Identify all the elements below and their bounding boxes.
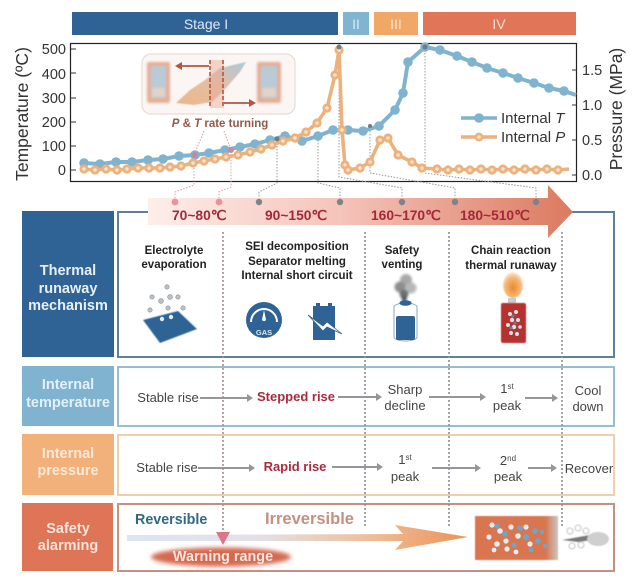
right axis ticks and labels [572, 63, 602, 184]
legend: Internal P [501, 129, 565, 146]
flow arrows [200, 397, 554, 398]
internal temperature stages: Stepped rise [257, 389, 335, 404]
panel: safety alarming [22, 503, 614, 571]
left axis title: Temperature (ºC) [12, 47, 32, 181]
right axis title: Pressure (MPa) [606, 48, 626, 170]
left axis ticks and labels: 0 [58, 163, 66, 179]
panel: thermal runaway mechanism [22, 211, 614, 357]
mechanism captions: Electrolyte [145, 245, 203, 257]
right axis ticks and labels: 1.0 [582, 98, 602, 114]
mechanism captions: evaporation [141, 259, 207, 271]
internal pressure stages: 2 [500, 453, 516, 468]
internal pressure stages: Rapid rise [264, 459, 326, 474]
row label: pressure [37, 463, 99, 479]
right axis ticks and labels: 0.0 [582, 168, 602, 184]
internal pressure stages: peak [391, 469, 420, 484]
reversibility gradient arrow [127, 525, 468, 550]
left axis ticks and labels: 200 [42, 115, 66, 131]
internal temperature stages: decline [384, 398, 426, 413]
mechanism captions: SEI decomposition [245, 241, 349, 253]
temperature range labels: 180~510℃ [460, 208, 530, 223]
temperature range labels [172, 208, 530, 223]
mechanism captions: Safety [385, 245, 420, 257]
stage bar: II [352, 16, 360, 32]
left axis ticks and labels: 300 [42, 91, 66, 107]
internal temperature stages: 1 [500, 381, 514, 396]
internal temperature stages: Stable rise [137, 390, 199, 405]
row label: alarming [38, 538, 98, 554]
mechanism captions: thermal runaway [465, 260, 557, 272]
internal pressure stages: nd [507, 454, 516, 463]
temperature range labels: 160~170℃ [371, 208, 441, 223]
warning range [151, 548, 291, 566]
icon: electrolyte evaporation [143, 285, 197, 343]
stage bar: IV [492, 16, 506, 32]
panel: internal pressure [22, 434, 614, 495]
warning marker arrowhead [216, 532, 230, 545]
warning range: Warning range [173, 549, 273, 565]
arrow dots [172, 199, 539, 205]
internal temperature stages: Cool [575, 383, 601, 398]
reversible label: Reversible [135, 512, 207, 528]
peak markers [192, 44, 428, 158]
temperature arrow [148, 185, 573, 238]
internal pressure stages: Recover [565, 461, 614, 476]
curve: internal pressure [84, 50, 569, 170]
temperature range labels: 90~150℃ [265, 208, 327, 223]
icon: burning cell [501, 272, 526, 343]
icon: gas gauge: GAS [256, 328, 272, 337]
row label: Internal [42, 446, 94, 462]
legend: Internal T [501, 110, 566, 127]
mechanism captions: Separator melting [248, 256, 346, 268]
panel: internal temperature [22, 366, 614, 426]
internal temperature stages: down [572, 399, 604, 414]
inset dashed lines and arrows [180, 60, 250, 108]
internal temperature stages: peak [493, 398, 522, 413]
inset: P and T rate turning [142, 54, 295, 114]
row label: runaway [39, 281, 97, 297]
left axis ticks and labels: 400 [42, 67, 66, 83]
internal pressure stages [136, 452, 614, 484]
curve: internal temperature [84, 47, 576, 164]
left axis ticks and labels: 100 [42, 139, 66, 155]
inset left cell [147, 62, 170, 103]
icon: failing cell with venting gas [475, 516, 609, 560]
mechanism captions [141, 241, 557, 282]
dotted stage dividers [223, 232, 562, 533]
left axis ticks and labels: 500 [42, 42, 66, 58]
internal pressure stages: 1 [398, 452, 412, 467]
icon: gas gauge [246, 302, 282, 338]
temperature range labels: 70~80℃ [172, 208, 227, 223]
irreversible label: Irreversible [265, 510, 354, 528]
inset scatter [176, 62, 246, 105]
flow arrows [198, 467, 553, 468]
mechanism captions: venting [382, 259, 422, 271]
internal temperature stages: st [508, 382, 514, 391]
icon: internal short circuit battery [308, 303, 342, 340]
right axis ticks and labels: 1.5 [582, 63, 602, 79]
chart: temperature and pressure curves [12, 42, 626, 202]
internal pressure stages: peak [494, 469, 523, 484]
mechanism captions: Internal short circuit [241, 270, 353, 282]
left axis ticks and labels [42, 42, 76, 179]
stage bar: III [390, 16, 402, 32]
internal pressure stages: st [406, 453, 412, 462]
row label: Internal [42, 377, 94, 393]
row label: Thermal [40, 263, 96, 279]
dotted leader lines [175, 47, 536, 202]
icon: safety venting cell [394, 274, 417, 341]
row label: Safety [46, 521, 90, 537]
row label: temperature [26, 395, 110, 411]
internal temperature stages [137, 381, 604, 414]
stage bar: Stage I [184, 16, 228, 32]
right axis ticks and labels: 0.5 [582, 133, 602, 149]
row label: mechanism [28, 298, 108, 314]
mechanism captions: Chain reaction [471, 245, 551, 257]
internal pressure stages: Stable rise [136, 460, 198, 475]
inset right cell [257, 62, 281, 103]
inset caption: P & T rate turning [172, 118, 268, 130]
stage bar [72, 12, 576, 35]
legend [461, 110, 566, 146]
internal temperature stages: Sharp [388, 382, 422, 397]
